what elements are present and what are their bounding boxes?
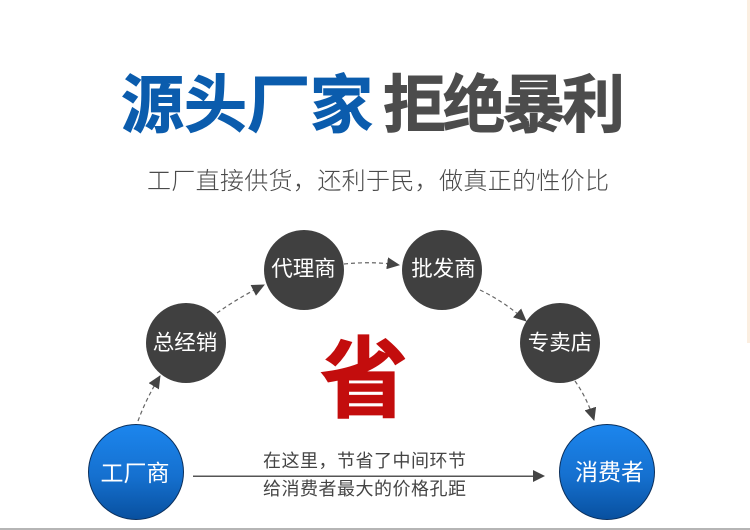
node: consumer [560,424,654,520]
node: general distributor [146,303,226,383]
arrow: factory to general distributor [138,376,160,421]
node: agent: 代理商 [271,257,336,281]
arrow: retail store to consumer [575,381,594,420]
caption below arrow: 给消费者最大的价格孔距 [263,479,466,499]
arrow: agent to wholesaler [344,263,399,265]
title [121,71,625,141]
direct arrow: factory to consumer [193,470,545,482]
caption above arrow: 在这里，节省了中间环节 [263,451,466,471]
arrow: wholesaler to retail store [480,290,526,321]
big red character: 省 [320,330,408,429]
title: blue part: 源头厂家 [121,71,373,141]
node: retail store [520,303,600,383]
node: factory [88,424,184,520]
title: gray part: 拒绝暴利 [383,71,625,141]
subtitle: 工厂直接供货，还利于民，做真正的性价比 [147,168,609,195]
node: factory: 工厂商 [100,460,170,486]
node: wholesaler: 批发商 [411,257,476,281]
node: wholesaler [402,230,482,310]
node: consumer: 消费者 [575,459,644,485]
arrow: general distributor to agent [217,285,264,313]
node: retail store: 专卖店 [528,331,592,355]
node: general distributor: 总经销 [153,331,217,355]
node: agent [264,230,344,310]
